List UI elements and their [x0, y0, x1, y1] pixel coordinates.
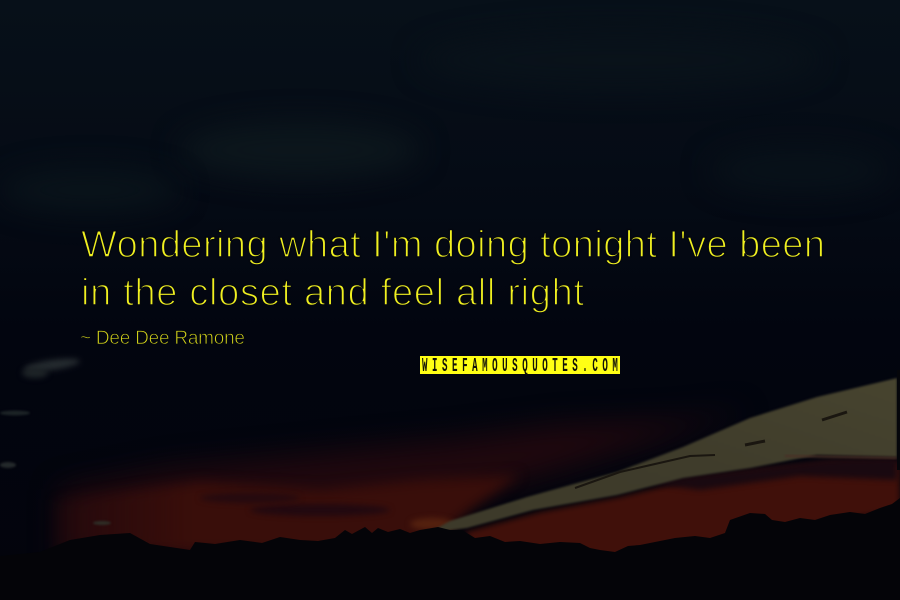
background: tree line silhouette — [0, 498, 900, 600]
background: pale sunset cloud band — [428, 370, 900, 533]
wordmark badge: WISEFAMOUSQUOTES.COM — [422, 357, 618, 377]
quote text — [81, 224, 825, 314]
quote line 2: in the closet and feel all right — [81, 272, 584, 314]
background: red sunset glow — [55, 410, 900, 560]
attribution: ~ Dee Dee Ramone — [80, 328, 245, 349]
background: distant grey clouds — [0, 356, 111, 525]
quote line 1: Wondering what I'm doing tonight I've been — [81, 224, 825, 266]
